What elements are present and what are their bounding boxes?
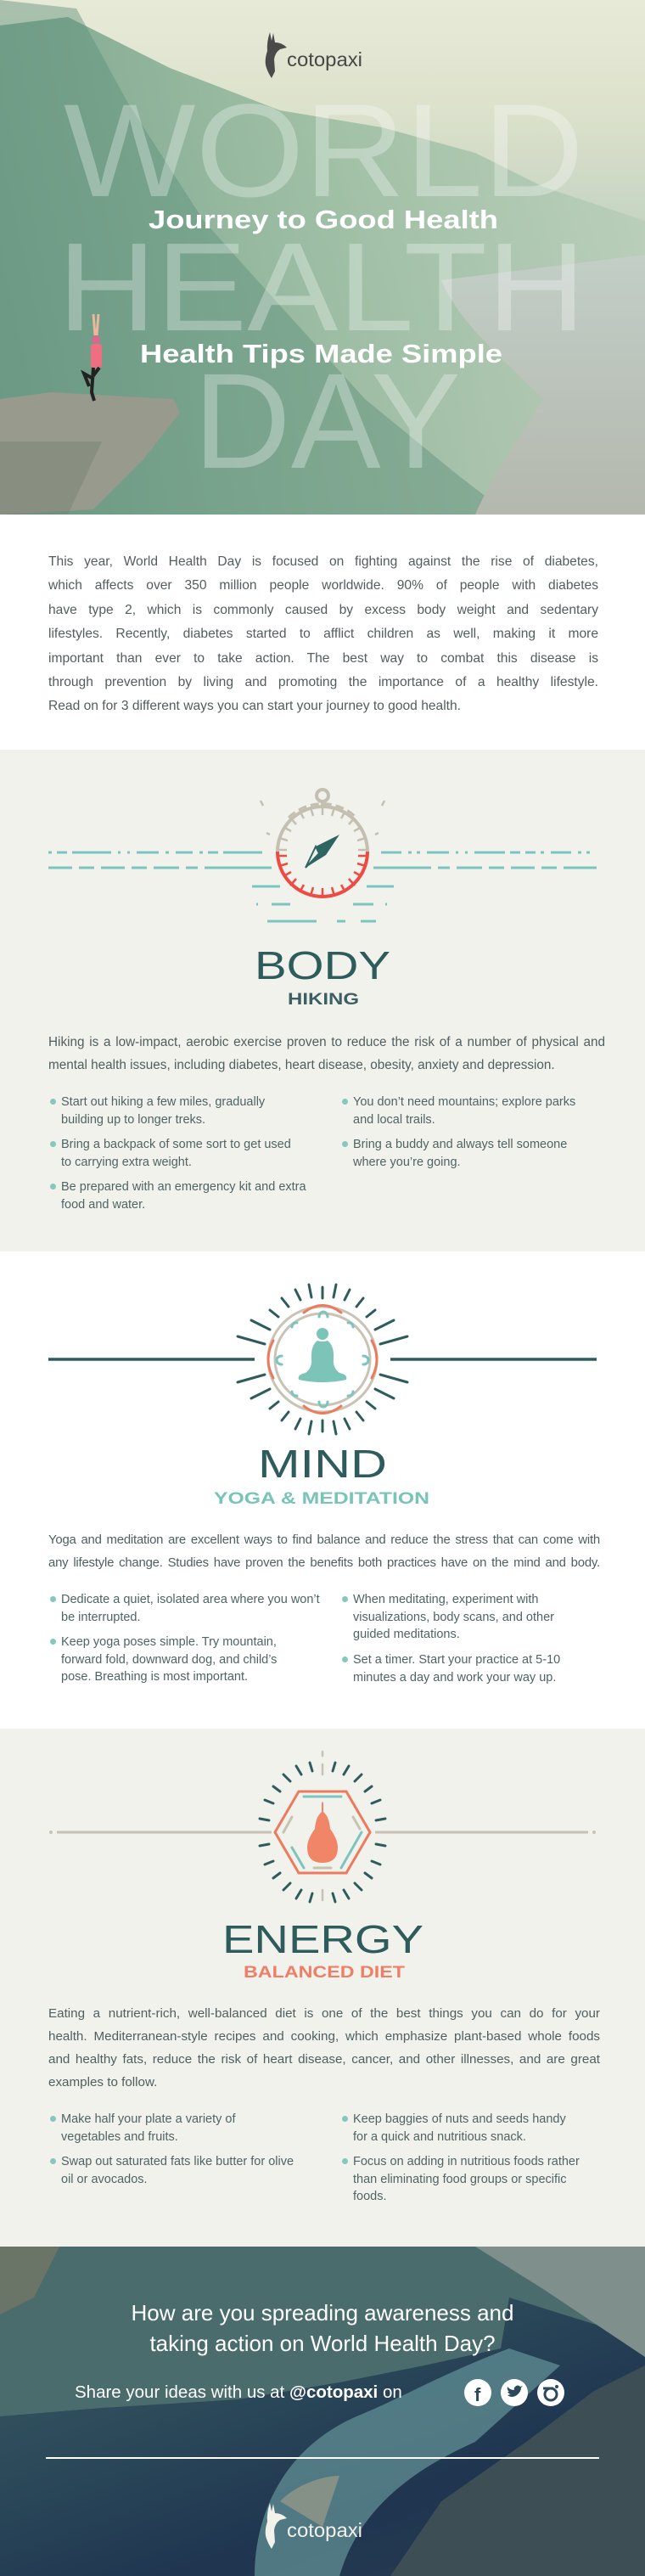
heading: Journey to Good Health xyxy=(140,205,502,368)
intro text: which affects over 350 million people worldwide. 90% of people with diabetes xyxy=(48,578,598,593)
footer logo: cotopaxi: cotopaxi xyxy=(287,2519,362,2541)
bullet list: hiking tips: Start out hiking a few miles, gradually building up to longer treks. xyxy=(61,1095,265,1126)
background title: WORLD HEALTH DAY: DAY xyxy=(194,345,461,497)
panel: mind / yoga & meditation xyxy=(0,1251,645,1729)
heading: BODY: HIKING xyxy=(288,991,359,1009)
heading: BODY xyxy=(255,943,390,1009)
mind paragraph: Yoga and meditation are excellent ways to find balance and reduce the stress that can come with xyxy=(48,1533,600,1547)
heading: Journey to Good Health: Health Tips Made Simple xyxy=(140,339,502,368)
woman doing yoga xyxy=(84,314,102,401)
bullet list: hiking tips: You don’t need mountains; explore parks and local trails. xyxy=(353,1095,575,1126)
icon: facebook xyxy=(464,2379,491,2406)
mind paragraph: any lifestyle change. Studies have proven the benefits both practices have on the mind and body. xyxy=(48,1556,600,1570)
icon: twitter xyxy=(501,2379,528,2406)
footer: call to action xyxy=(0,2247,645,2576)
intro text: have type 2, which is commonly caused by excess body weight and sedentary xyxy=(48,603,598,617)
bullet list: diet tips: Make half your plate a variety of vegetables and fruits. xyxy=(61,2112,236,2143)
energy paragraph: examples to follow. xyxy=(48,2075,157,2089)
question text: How are you spreading awareness and xyxy=(132,2300,513,2326)
bullet list: hiking tips: Bring a buddy and always tell someone where you’re going. xyxy=(353,1138,567,1168)
heading: MIND xyxy=(214,1448,429,1508)
bullet list: yoga tips: Keep yoga poses simple. Try mountain, forward fold, downward dog, and child’s pose. Breathing is most important. xyxy=(61,1635,277,1684)
share line with social icons xyxy=(75,2379,564,2406)
question text xyxy=(132,2300,513,2356)
intro text: important than ever to take action. The best way to combat this disease is xyxy=(48,651,598,666)
bullet list: diet tips: Keep baggies of nuts and seeds handy for a quick and nutritious snack. xyxy=(353,2112,566,2143)
heading: Journey to Good Health: Journey to Good Health xyxy=(149,205,498,234)
heading: ENERGY: BALANCED DIET xyxy=(244,1964,405,1982)
heading: BODY: BODY xyxy=(255,943,390,987)
panel: body / hiking xyxy=(0,750,645,1251)
icon: instagram xyxy=(537,2379,564,2406)
bullet list: diet tips: Focus on adding in nutritious foods rather than eliminating food groups or specific foods. xyxy=(353,2155,580,2203)
logo: cotopaxi xyxy=(265,32,362,78)
energy paragraph xyxy=(48,2006,600,2089)
intro text: lifestyles. Recently, diabetes started to afflict children as well, making it more xyxy=(48,627,598,641)
intro text: through prevention by living and promoting the importance of a healthy lifestyle. xyxy=(48,675,598,689)
mind paragraph xyxy=(48,1533,600,1570)
intro text xyxy=(48,554,598,713)
bullet list: yoga tips: Set a timer. Start your practice at 5-10 minutes a day and work your way up. xyxy=(353,1653,560,1685)
panel: energy / balanced diet xyxy=(0,1729,645,2247)
energy paragraph: and healthy fats, reduce the risk of heart disease, cancer, and other illnesses, and are great xyxy=(48,2052,600,2067)
icon: facebook: f xyxy=(474,2384,481,2405)
heading: ENERGY xyxy=(222,1917,423,1982)
share line with social icons: Share your ideas with us at @cotopaxi on xyxy=(75,2382,402,2402)
bullet list: yoga tips xyxy=(50,1593,560,1685)
hero section xyxy=(0,0,645,515)
logo: cotopaxi: cotopaxi xyxy=(287,48,362,70)
bullet list: hiking tips xyxy=(50,1095,575,1211)
background title: WORLD HEALTH DAY: HEALTH xyxy=(58,217,586,357)
bullet list: diet tips: Swap out saturated fats like butter for olive oil or avocados. xyxy=(61,2155,294,2185)
icon: meditation mandala with rays xyxy=(48,1284,597,1435)
heading: ENERGY: ENERGY xyxy=(222,1917,423,1961)
energy paragraph: health. Mediterranean-style recipes and cooking, which emphasize plant-based whole foods xyxy=(48,2029,600,2044)
icon: compass with dashed horizon lines xyxy=(48,788,597,922)
bullet list: yoga tips: When meditating, experiment with visualizations, body scans, and other guided meditations. xyxy=(353,1593,554,1641)
background title: WORLD HEALTH DAY xyxy=(58,77,586,497)
heading: MIND: YOGA & MEDITATION xyxy=(214,1490,429,1508)
energy paragraph: Eating a nutrient-rich, well-balanced diet is one of the best things you can do for your xyxy=(48,2006,600,2021)
rock ledge xyxy=(0,392,180,515)
bullet list: hiking tips: Be prepared with an emergency kit and extra food and water. xyxy=(61,1180,306,1211)
icon: pear in hexagon xyxy=(49,1751,596,1904)
bullet list: yoga tips: Dedicate a quiet, isolated area where you won’t be interrupted. xyxy=(61,1593,320,1623)
bullet list: hiking tips: Bring a backpack of some sort to get used to carrying extra weight. xyxy=(61,1138,291,1168)
footer logo: cotopaxi xyxy=(265,2503,362,2549)
intro text: Read on for 3 different ways you can start your journey to good health. xyxy=(48,699,461,713)
intro text: This year, World Health Day is focused on fighting against the rise of diabetes, xyxy=(48,554,598,569)
body paragraph: Hiking is a low-impact, aerobic exercise proven to reduce the risk of a number of physical and mental health issues, including diabetes, heart disease, obesity, anxiety and depression. xyxy=(48,1035,605,1072)
question text: taking action on World Health Day? xyxy=(149,2331,496,2356)
bullet list: diet tips xyxy=(50,2112,580,2203)
background title: WORLD HEALTH DAY: WORLD xyxy=(64,77,584,225)
